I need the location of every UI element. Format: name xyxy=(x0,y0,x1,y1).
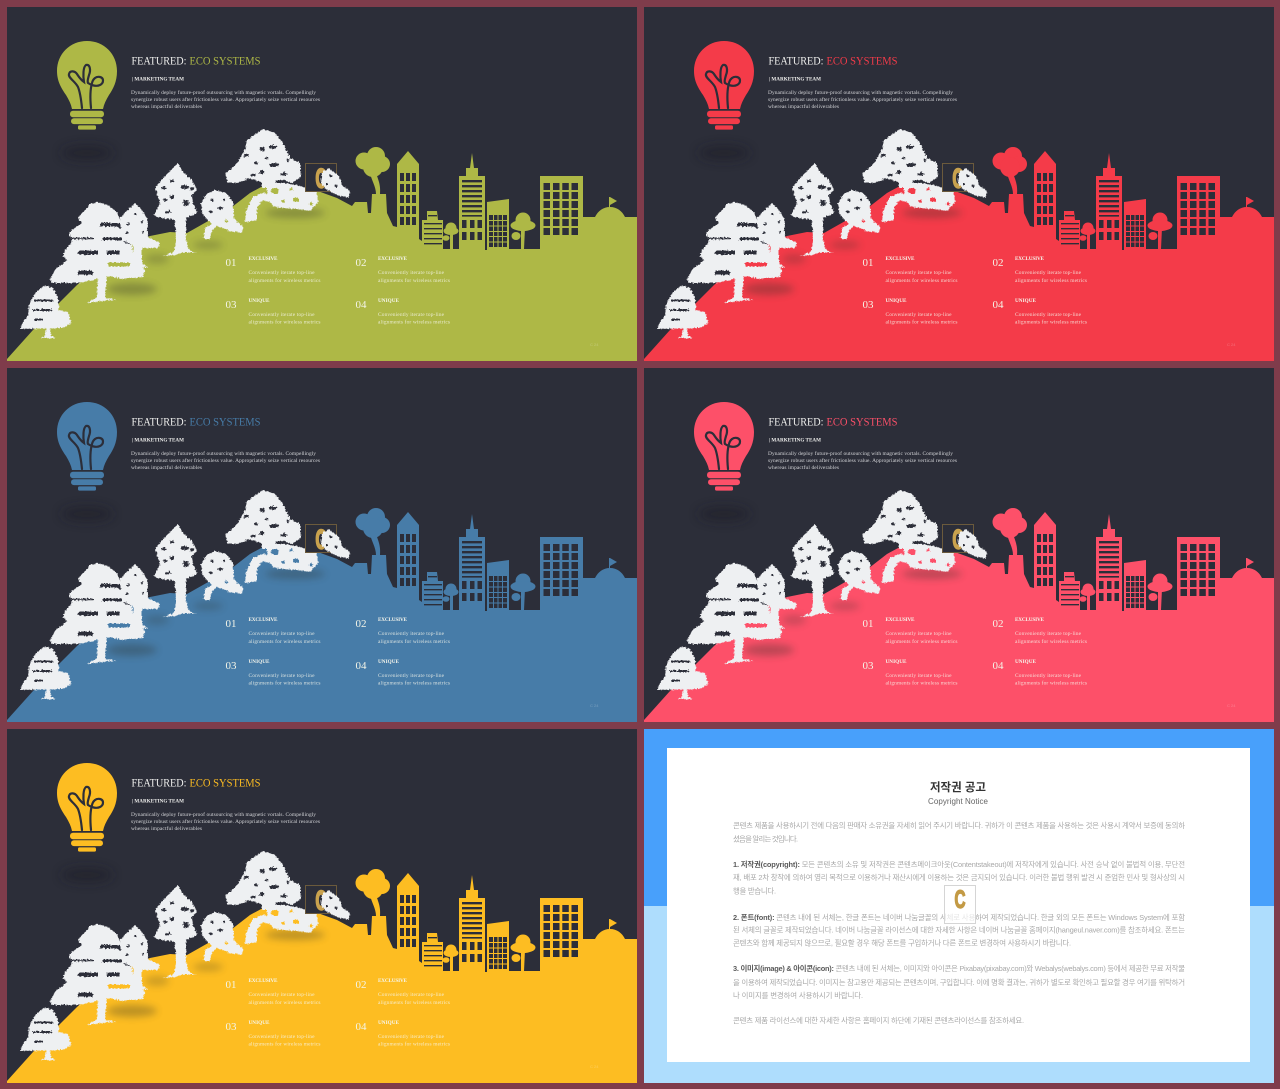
notice section 2 font: 콘텐츠와 함께 제공되지 않으므로, 필요할 경우 해당 폰트를 구입하거나 다른 폰트로 변경하여 사용하시기 바랍니다. xyxy=(733,938,1071,948)
item 02: alignments for wireless metrics xyxy=(378,277,450,284)
title: ECO SYSTEMS xyxy=(826,54,898,68)
notice section 2 font: 2. 폰트(font): 콘텐츠 내에 된 서체는, 한글 폰트는 네이버 나눔글꼴의 서체로 사용하여 제작되었습니다. 한글 외의 모든 폰트는 Windows System에 포함 xyxy=(733,913,1185,922)
item 02: EXCLUSIVE xyxy=(1015,256,1045,262)
item 04: UNIQUE xyxy=(1015,298,1037,304)
notice section 2 font: 된 서체의 글꼴로 제작되었습니다. 네이버 나눔글꼴 라이선스에 대한 자세한 사항은 네이버 나눔글꼴 홈페이지(hangeul.naver.com)를 참조하세요. 폰트는 xyxy=(733,926,1185,934)
title xyxy=(132,416,260,428)
item 02 xyxy=(356,978,450,1006)
tree shadows xyxy=(61,867,325,1017)
item 04: alignments for wireless metrics xyxy=(378,318,450,326)
subtitle: | MARKETING TEAM xyxy=(769,76,821,82)
icon: blue light bulb xyxy=(57,402,117,491)
item 04: UNIQUE xyxy=(378,659,400,665)
description xyxy=(131,89,320,110)
notice intro: 콘텐츠 제품을 사용하시기 전에 다음의 판매자 소유권을 자세히 읽어 주시기 바랍니다. 귀하가 이 콘텐츠 제품을 사용하는 것은 사용시 계약서 보증에 동의하 xyxy=(733,821,1185,830)
item 03: alignments for wireless metrics xyxy=(886,680,958,686)
description: synergize robust users after frictionless value. Appropriately seize vertical resources xyxy=(768,457,957,464)
item 01: alignments for wireless metrics xyxy=(886,277,958,284)
blue hill and city skyline xyxy=(7,508,637,722)
item 03 xyxy=(862,298,958,326)
item 02: 02 xyxy=(992,618,1004,630)
item 04 xyxy=(356,298,450,326)
item 01: EXCLUSIVE xyxy=(886,617,915,623)
item 02: Conveniently iterate top-line xyxy=(1015,631,1082,637)
item 02: Conveniently iterate top-line xyxy=(378,270,445,276)
notice section 3 image and icon: 을 이용하여 제작되었습니다. 이미지는 참고용만 제공되는 콘텐츠이며, 구입합니다. 이에 명확 결과는, 귀하가 별도로 확인하고 필요할 경우 여기를 위탁하거 xyxy=(733,978,1185,987)
item 04 xyxy=(992,659,1087,686)
notice section 3 image and icon: 3. 이미지(image) & 아이콘(icon): 콘텐츠 내에 된 서체는, 이미지와 아이콘은 Pixabay(pixabay.com)와 Webalys(webalys.com) 등에서 제공한 무료 저작물 xyxy=(733,964,1185,973)
panel: red eco systems xyxy=(644,7,1274,361)
description: Dynamically deploy future-proof outsourcing with magnetic vortals. Compellingly xyxy=(768,89,953,96)
description: Dynamically deploy future-proof outsourcing with magnetic vortals. Compellingly xyxy=(131,811,316,818)
title: ECO SYSTEMS xyxy=(190,54,260,68)
item 02: 02 xyxy=(992,257,1004,269)
white tree beside logo xyxy=(958,168,987,198)
notice section 1 copyright: 행을 받습니다. xyxy=(733,886,776,896)
item 02: 02 xyxy=(356,257,366,269)
notice title: 저작권 공고 xyxy=(930,780,986,794)
description: Dynamically deploy future-proof outsourcing with magnetic vortals. Compellingly xyxy=(768,450,953,457)
item 03: alignments for wireless metrics xyxy=(248,318,320,326)
item 03: UNIQUE xyxy=(248,659,270,665)
item 03: Conveniently iterate top-line xyxy=(248,1034,315,1040)
subtitle: | MARKETING TEAM xyxy=(132,798,184,804)
item 01: Conveniently iterate top-line xyxy=(886,631,952,637)
item 02 xyxy=(992,256,1087,284)
item 04: alignments for wireless metrics xyxy=(378,680,450,686)
item 01: 01 xyxy=(226,979,236,991)
item 01 xyxy=(226,978,320,1006)
description: Dynamically deploy future-proof outsourcing with magnetic vortals. Compellingly xyxy=(131,89,316,96)
logo badge xyxy=(306,164,336,194)
item 04: 04 xyxy=(356,660,367,672)
item 04: alignments for wireless metrics xyxy=(1015,318,1087,326)
item 03: alignments for wireless metrics xyxy=(248,1040,320,1048)
item 04: 04 xyxy=(992,299,1004,311)
page number: C 24 xyxy=(590,703,599,708)
item 01 xyxy=(862,256,958,284)
tree shadows xyxy=(698,145,962,295)
page number: C 24 xyxy=(1227,703,1236,708)
notice subtitle: Copyright Notice xyxy=(928,797,989,806)
item 02: Conveniently iterate top-line xyxy=(378,631,445,637)
white tree beside logo xyxy=(958,529,987,559)
item 03: Conveniently iterate top-line xyxy=(886,312,952,318)
item 03: 03 xyxy=(226,660,237,672)
item 01: EXCLUSIVE xyxy=(886,256,915,262)
item 03: alignments for wireless metrics xyxy=(248,680,320,686)
title: FEATURED: xyxy=(132,776,186,790)
panel: green eco systems xyxy=(7,7,637,361)
white tree beside logo xyxy=(321,890,350,920)
title: FEATURED: xyxy=(768,416,824,428)
item 02: alignments for wireless metrics xyxy=(1015,277,1087,284)
logo badge xyxy=(942,524,974,554)
item 01: Conveniently iterate top-line xyxy=(886,270,952,276)
item 02: 02 xyxy=(356,618,366,630)
item 01: alignments for wireless metrics xyxy=(248,999,320,1006)
description: synergize robust users after frictionless value. Appropriately seize vertical resources xyxy=(768,96,957,103)
white trees xyxy=(20,851,318,1060)
title xyxy=(768,416,898,428)
item 03 xyxy=(226,1020,320,1048)
white tree beside logo xyxy=(321,168,350,198)
item 04: alignments for wireless metrics xyxy=(378,1040,450,1048)
notice intro: 셨음을 알리는 것입니다. xyxy=(733,834,798,844)
item 01: EXCLUSIVE xyxy=(248,617,278,623)
notice section 3 image and icon xyxy=(733,964,1185,1000)
tree shadows xyxy=(61,506,325,656)
page number: C 24 xyxy=(1227,342,1236,347)
item 02: Conveniently iterate top-line xyxy=(1015,270,1082,276)
watermark logo: C xyxy=(954,886,966,914)
panel: blue eco systems xyxy=(7,368,637,722)
item 04 xyxy=(992,298,1087,326)
item 03: UNIQUE xyxy=(248,1020,270,1026)
description: whereas impactful deliverables xyxy=(131,464,202,471)
title xyxy=(132,776,260,790)
item 03: 03 xyxy=(862,660,874,672)
icon: red light bulb xyxy=(694,41,754,130)
notice section 1 copyright: 재, 배포 2차 창작에 의하여 영리 목적으로 이용하거나 재산시에게 이용하는 것은 금지되어 있습니다. 이러한 불법 행위 발견 시 준엄한 민사 및 형사상의 시 xyxy=(733,873,1185,882)
icon: yellow light bulb xyxy=(57,763,117,852)
logo badge xyxy=(942,164,974,194)
logo badge xyxy=(306,524,336,554)
item 01: Conveniently iterate top-line xyxy=(248,270,315,276)
item 04 xyxy=(356,659,450,686)
item 03: alignments for wireless metrics xyxy=(886,318,958,326)
description: whereas impactful deliverables xyxy=(131,103,202,110)
item 03: Conveniently iterate top-line xyxy=(248,312,315,318)
item 01 xyxy=(862,617,958,645)
item 02: EXCLUSIVE xyxy=(378,978,408,984)
item 01 xyxy=(226,256,320,284)
item 02: Conveniently iterate top-line xyxy=(378,992,445,998)
description xyxy=(131,450,320,471)
item 03: UNIQUE xyxy=(886,659,907,665)
item 04: Conveniently iterate top-line xyxy=(1015,673,1082,679)
item 01: alignments for wireless metrics xyxy=(248,638,320,645)
item 02: alignments for wireless metrics xyxy=(378,638,450,645)
item 02: EXCLUSIVE xyxy=(378,617,408,623)
item 03 xyxy=(226,298,320,326)
subtitle: | MARKETING TEAM xyxy=(769,438,821,444)
description: whereas impactful deliverables xyxy=(131,825,202,832)
panel: copyright notice xyxy=(644,729,1274,1083)
description: whereas impactful deliverables xyxy=(768,103,839,110)
item 03: UNIQUE xyxy=(886,298,907,304)
description: synergize robust users after frictionless value. Appropriately seize vertical resources xyxy=(131,818,320,825)
item 01: Conveniently iterate top-line xyxy=(248,992,315,998)
green hill and city skyline xyxy=(7,147,637,361)
title: FEATURED: xyxy=(132,416,186,428)
tree shadows xyxy=(61,145,325,295)
item 01: EXCLUSIVE xyxy=(248,256,278,262)
item 01: EXCLUSIVE xyxy=(248,978,278,984)
description: Dynamically deploy future-proof outsourcing with magnetic vortals. Compellingly xyxy=(131,450,316,457)
panel: yellow eco systems xyxy=(7,729,637,1083)
title: ECO SYSTEMS xyxy=(190,776,260,790)
item 04: UNIQUE xyxy=(1015,659,1037,665)
title: ECO SYSTEMS xyxy=(190,416,260,428)
notice section 2 font xyxy=(733,913,1185,948)
item 04: Conveniently iterate top-line xyxy=(378,1034,445,1040)
description xyxy=(768,450,957,471)
item 04: alignments for wireless metrics xyxy=(1015,680,1087,686)
item 03: 03 xyxy=(862,299,874,311)
yellow hill and city skyline xyxy=(7,869,637,1083)
item 02: alignments for wireless metrics xyxy=(1015,638,1087,645)
item 03: Conveniently iterate top-line xyxy=(248,673,315,679)
page number: C 24 xyxy=(590,342,599,347)
page number: C 24 xyxy=(590,1064,599,1069)
white trees xyxy=(20,490,318,699)
title: FEATURED: xyxy=(132,54,186,68)
item 04 xyxy=(356,1020,450,1048)
white tree beside logo xyxy=(321,529,350,559)
white trees xyxy=(20,129,318,338)
pink hill and city skyline xyxy=(644,508,1274,722)
title xyxy=(768,54,898,68)
panel: pink eco systems xyxy=(644,368,1274,722)
item 03: 03 xyxy=(226,299,237,311)
item 03: Conveniently iterate top-line xyxy=(886,673,952,679)
icon: pink light bulb xyxy=(694,402,754,491)
subtitle: | MARKETING TEAM xyxy=(132,438,184,444)
item 02 xyxy=(356,617,450,645)
item 02: alignments for wireless metrics xyxy=(378,999,450,1006)
description xyxy=(768,89,957,110)
item 04: UNIQUE xyxy=(378,298,400,304)
notice closing line: 콘텐츠 제품 라이선스에 대한 자세한 사항은 홈페이지 하단에 기재된 콘텐츠라이선스를 참조하세요. xyxy=(733,1016,1024,1025)
notice section 1 copyright: 1. 저작권(copyright): 모든 콘텐츠의 소유 및 저작권은 콘텐츠메이크아웃(Contentstakeout)에 저작자에게 있습니다. 사전 승낙 없이 불법적 이용, 무단전 xyxy=(733,860,1185,869)
description: synergize robust users after frictionless value. Appropriately seize vertical resources xyxy=(131,457,320,464)
title: ECO SYSTEMS xyxy=(826,416,898,428)
item 02 xyxy=(992,617,1087,645)
item 04: 04 xyxy=(356,1021,367,1033)
item 01: 01 xyxy=(862,257,874,269)
red hill and city skyline xyxy=(644,147,1274,361)
description: synergize robust users after frictionless value. Appropriately seize vertical resources xyxy=(131,96,320,103)
white trees xyxy=(657,129,955,338)
item 04: 04 xyxy=(356,299,367,311)
item 02: 02 xyxy=(356,979,366,991)
title xyxy=(132,54,260,68)
item 02: EXCLUSIVE xyxy=(1015,617,1045,623)
item 01: Conveniently iterate top-line xyxy=(248,631,315,637)
item 01 xyxy=(226,617,320,645)
item 03: 03 xyxy=(226,1021,237,1033)
description: whereas impactful deliverables xyxy=(768,464,839,471)
notice section 1 copyright xyxy=(733,860,1185,896)
item 01: 01 xyxy=(226,618,236,630)
item 01: alignments for wireless metrics xyxy=(248,277,320,284)
white trees xyxy=(657,490,955,699)
notice intro xyxy=(733,821,1185,844)
item 01: 01 xyxy=(226,257,236,269)
description xyxy=(131,811,320,832)
subtitle: | MARKETING TEAM xyxy=(132,76,184,82)
item 03: UNIQUE xyxy=(248,298,270,304)
item 03 xyxy=(226,659,320,686)
item 04: Conveniently iterate top-line xyxy=(378,312,445,318)
item 02: EXCLUSIVE xyxy=(378,256,408,262)
item 01: 01 xyxy=(862,618,874,630)
title: FEATURED: xyxy=(768,54,824,68)
icon: green light bulb xyxy=(57,41,117,130)
item 04: UNIQUE xyxy=(378,1020,400,1026)
item 04: Conveniently iterate top-line xyxy=(378,673,445,679)
tree shadows xyxy=(698,506,962,656)
item 03 xyxy=(862,659,958,686)
notice section 3 image and icon: 나 이미지를 변경하여 사용하시기 바랍니다. xyxy=(733,991,863,1000)
item 04: Conveniently iterate top-line xyxy=(1015,312,1082,318)
item 02 xyxy=(356,256,450,284)
item 04: 04 xyxy=(992,660,1004,672)
watermark logo xyxy=(944,886,976,924)
logo badge xyxy=(306,886,336,916)
item 01: alignments for wireless metrics xyxy=(886,638,958,645)
